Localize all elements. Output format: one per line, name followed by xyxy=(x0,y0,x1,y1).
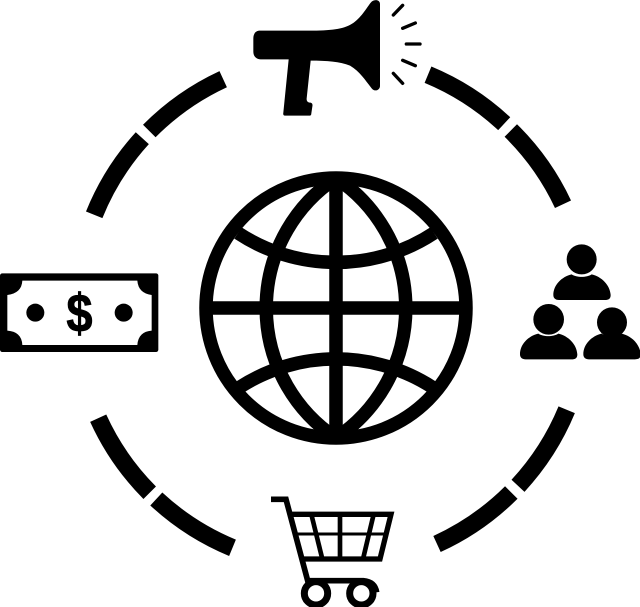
dashed ring around the globe xyxy=(94,75,567,548)
icon: dollar banknote xyxy=(0,273,158,352)
icon: group of three people xyxy=(520,244,640,359)
icon: megaphone xyxy=(253,0,420,116)
icon: globe xyxy=(206,178,466,438)
icon: dollar banknote: $ xyxy=(66,282,93,343)
icon: shopping cart xyxy=(271,499,391,605)
